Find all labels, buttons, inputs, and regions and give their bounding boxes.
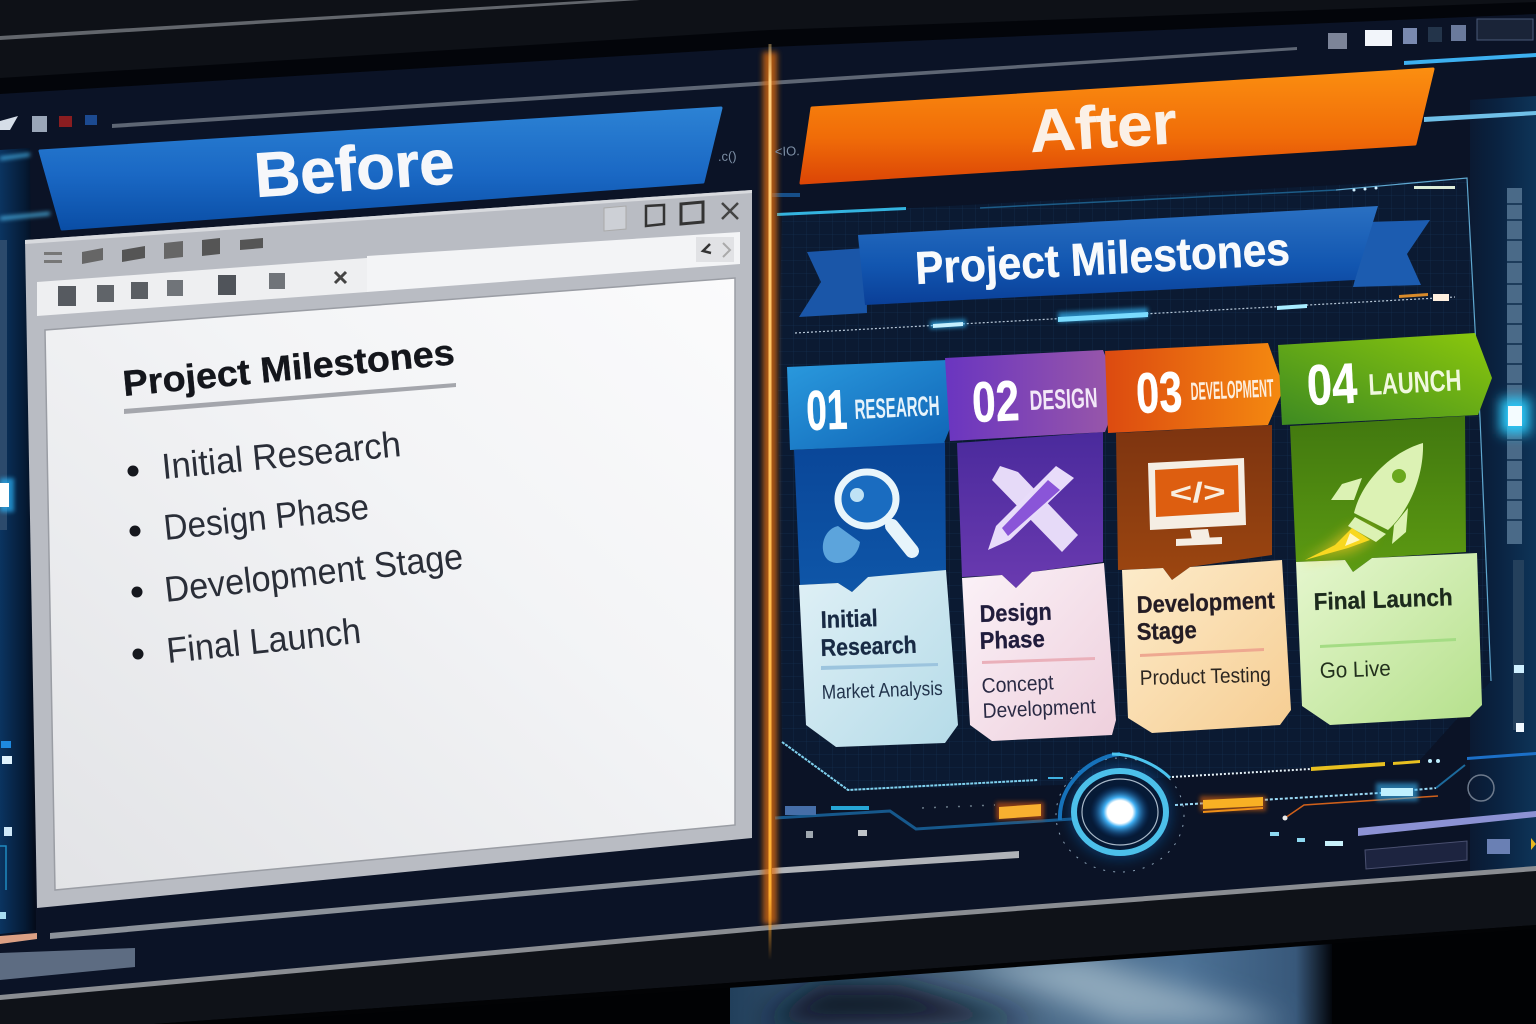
04 header arrow: LAUNCH [1368,364,1462,402]
bullet list: Final Launch [165,610,363,671]
bullet list: Initial Research [160,423,403,487]
bullet list: Design Phase [162,486,371,548]
after heading: After [1028,89,1179,165]
03 header arrow [1105,343,1284,433]
icon: code monitor [1148,458,1246,546]
01 card text: Research [820,632,917,662]
02 card text: Concept [981,671,1054,698]
01 text card [799,570,958,747]
window toolbar [37,232,740,316]
04 card text: Go Live [1319,656,1391,683]
before window [25,190,752,908]
milestone 01 research [787,360,960,747]
icon: ruler and pencil [988,466,1078,552]
04 card text: Final Launch [1313,584,1453,616]
milestone 03 development [1105,343,1291,733]
04 header arrow [1278,333,1492,425]
after banner [801,69,1433,183]
project milestones ribbon [799,206,1430,317]
orange and cyan indicators [996,775,1494,846]
milestone 02 design [945,350,1120,741]
02 card text: Phase [979,626,1045,655]
milestone 03 development: DEVELOPMENT [1190,374,1274,406]
icon: code monitor: </> [1169,476,1226,509]
ribbon title: Project Milestones [914,222,1291,294]
03 card text [1136,587,1275,690]
glowing hub [1056,754,1184,872]
04 text card [1296,553,1482,725]
03 icon panel [1116,425,1272,580]
center divider [763,44,777,960]
icon: rocket [1301,443,1423,562]
after code tag: <IO. [775,143,800,159]
document heading: Project Milestones [121,331,456,404]
04 icon panel [1290,416,1466,572]
01 card text: Initial [820,605,878,634]
01 card text: Market Analysis [821,678,943,704]
01 header arrow [787,360,960,450]
02 text card [962,563,1116,741]
before heading: Before [252,127,456,211]
03 header arrow: 03 [1135,360,1184,426]
02 card text: Development [982,695,1096,723]
02 header arrow [945,350,1120,441]
right segmented side bar [1500,188,1530,732]
02 header arrow: 02 [971,369,1021,435]
icon: magnifying glass [823,472,912,563]
01 header arrow: 01 [805,378,848,442]
01 card text [820,605,943,704]
right side HUD frame [772,178,1536,874]
02 card text [979,598,1096,723]
before code tag: .c() [718,148,737,164]
02 card text: Design [979,599,1052,628]
window title bar icons [44,202,738,264]
milestone 04 launch [1278,333,1492,725]
left side HUD details [0,115,97,919]
01 icon panel [794,442,946,592]
before banner [40,108,721,229]
04 header arrow: 04 [1305,351,1359,418]
03 text card [1122,560,1291,733]
top right HUD icons [1328,19,1536,122]
document page [45,278,735,890]
02 header arrow: DESIGN [1029,382,1098,416]
03 card text: Stage [1136,617,1197,646]
03 card text: Product Testing [1140,664,1271,690]
ribbon divider glow [795,293,1455,333]
bullet list: Development Stage [162,535,465,610]
02 icon panel [957,432,1103,588]
bullet list [128,423,465,671]
03 card text: Development [1136,587,1275,619]
04 card text [1313,584,1456,683]
01 header arrow: RESEARCH [854,390,940,425]
